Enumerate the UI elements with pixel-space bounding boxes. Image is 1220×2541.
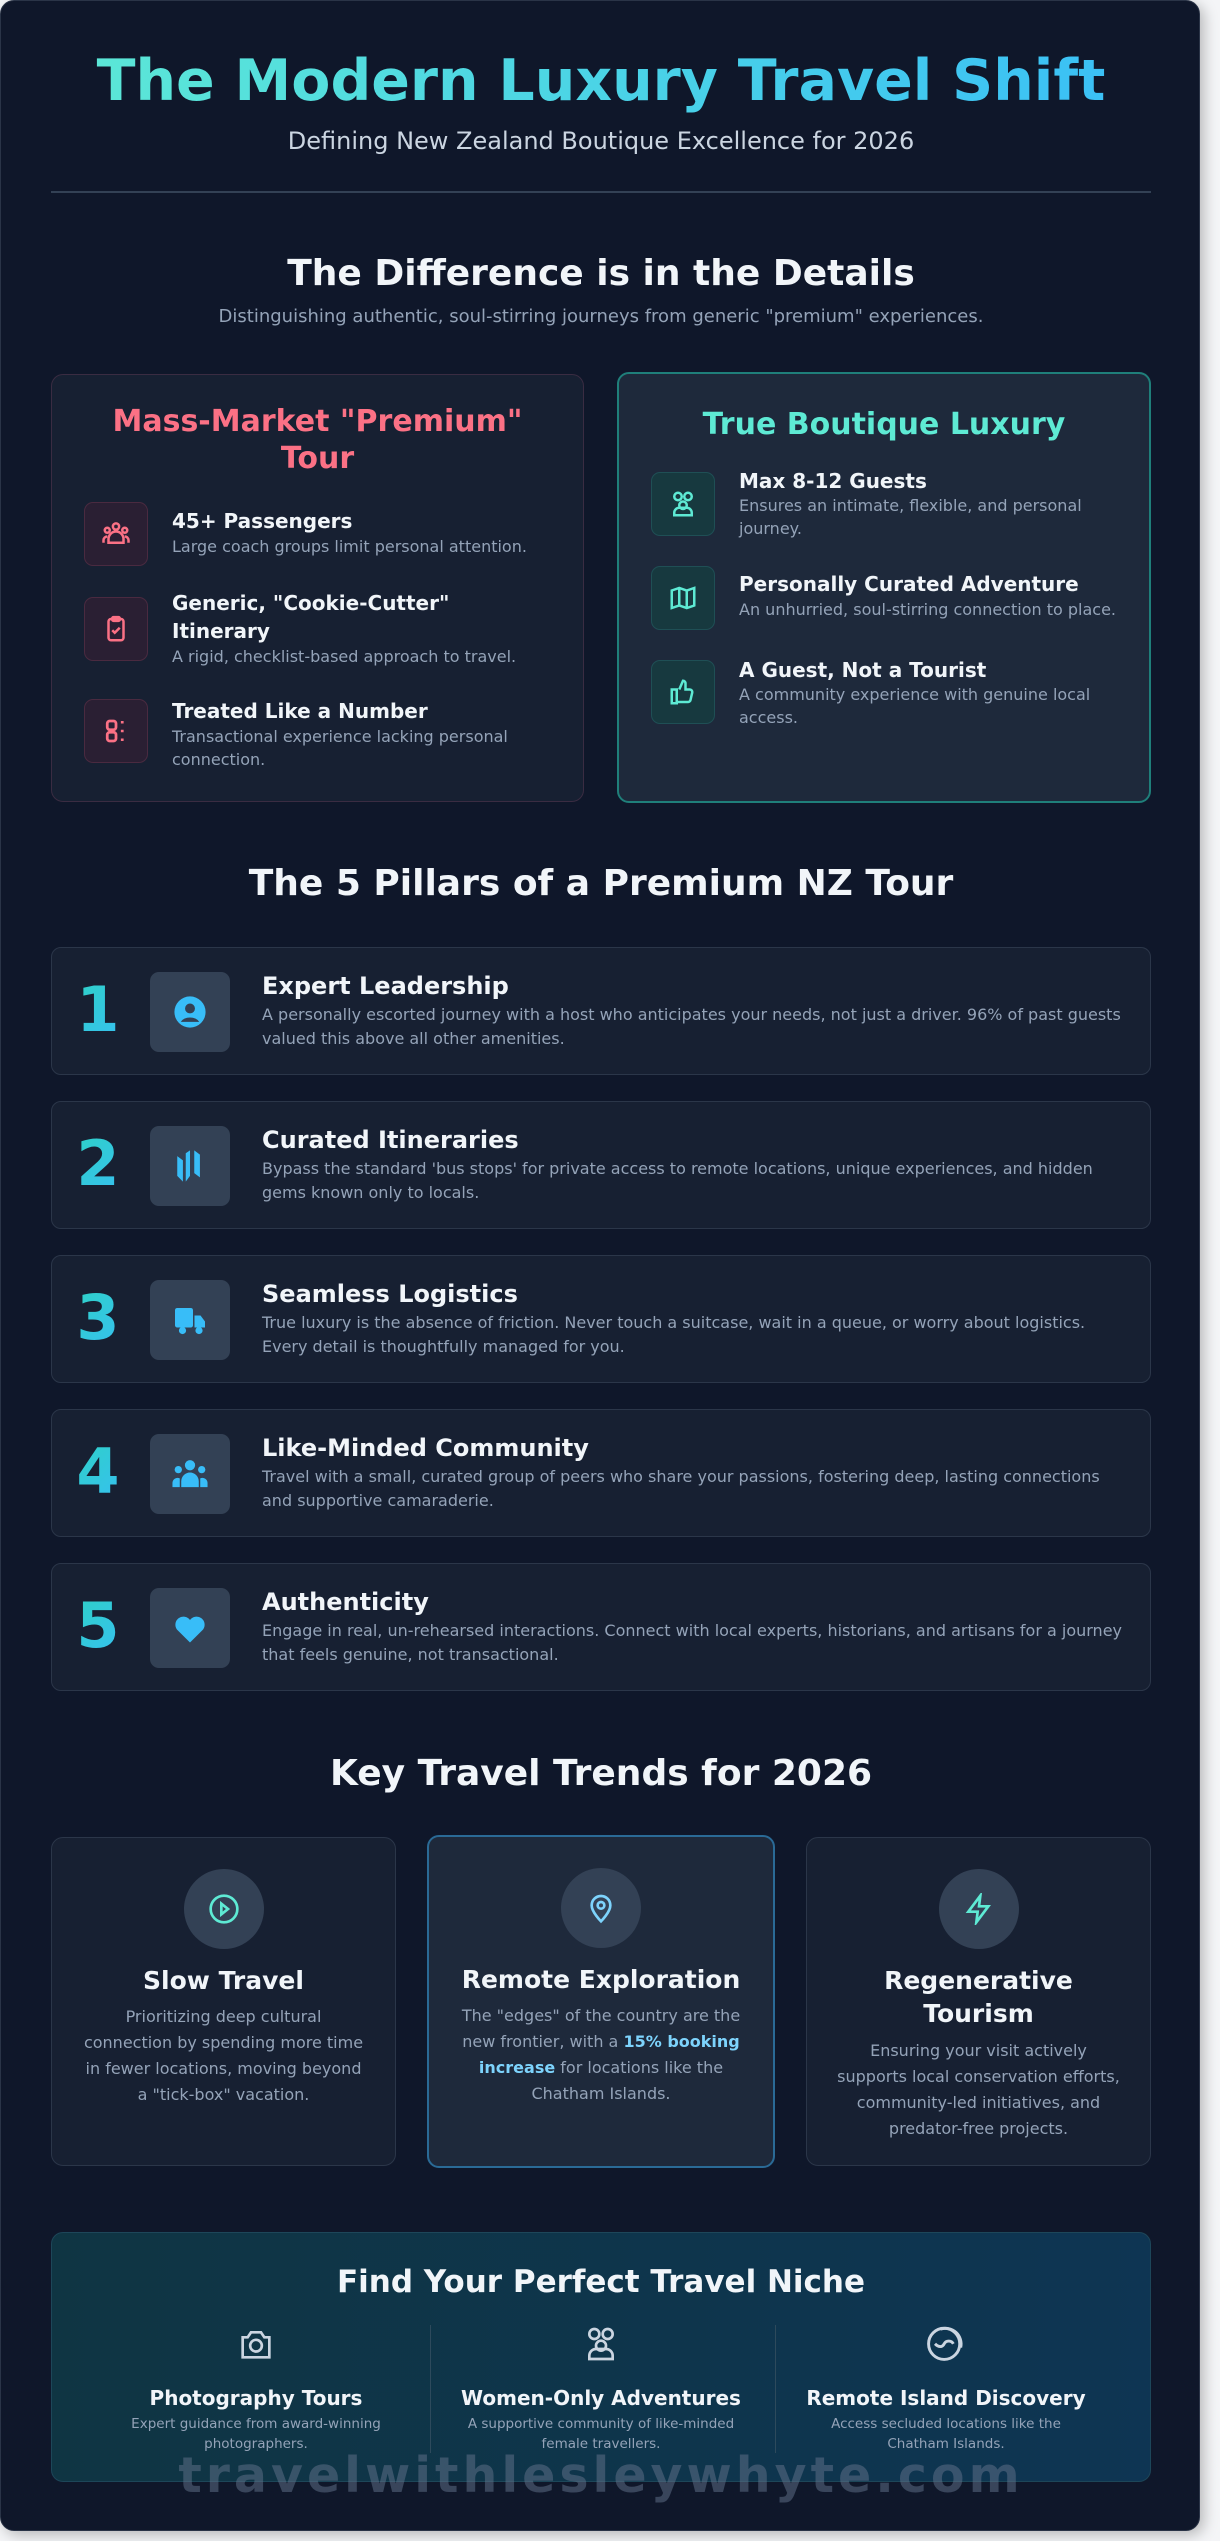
- item: guest not tourist: [651, 658, 1090, 727]
- niche: photography: [131, 2331, 381, 2452]
- icon: heart: [150, 1588, 230, 1668]
- item: max guests: [651, 469, 1082, 538]
- niche: photography: Expert guidance from award-winning: [131, 2416, 381, 2432]
- niche: women-only: Women-Only Adventures: [461, 2386, 741, 2410]
- title: The Modern Luxury Travel Shift: [97, 48, 1105, 114]
- trend card: regenerative: Regenerative: [884, 1966, 1073, 1995]
- pillar 1: [51, 947, 1151, 1075]
- niche heading: Find Your Perfect Travel Niche: [337, 2264, 865, 2300]
- watermark: travelwithlesleywhyte.com: [178, 2447, 1024, 2504]
- icon: pin: [561, 1868, 641, 1948]
- icon: person: [150, 972, 230, 1052]
- niche: photography: photographers.: [204, 2436, 308, 2452]
- heading: difference: The Difference is in the Details: [287, 253, 915, 294]
- panel: mass-market: [51, 374, 584, 802]
- panel heading: mass-market: Mass-Market "Premium": [112, 404, 522, 439]
- trend card: slow travel: Prioritizing deep cultural connection by spending more time in fewer locations, moving beyond a "tick-box" vacation.: [84, 2007, 363, 2104]
- trend card: remote exploration: The "edges" of the country are the new frontier, with a 15% booking increase for locations like the Chatham Islands.: [462, 2006, 740, 2103]
- niche: remote island: Chatham Islands.: [887, 2436, 1005, 2452]
- icon: bolt: [938, 1869, 1018, 1949]
- pillar 3: [51, 1255, 1151, 1383]
- pillar 3: Seamless Logistics: [262, 1280, 518, 1308]
- item: 45+ passengers: 45+ Passengers: [172, 509, 352, 533]
- panel heading: boutique: True Boutique Luxury: [703, 407, 1065, 442]
- icon: group: [150, 1434, 230, 1514]
- item: guest not tourist: A Guest, Not a Tourist: [739, 658, 986, 682]
- pillar 4: 4: [76, 1435, 120, 1508]
- pillar 1: A personally escorted journey with a host who anticipates your needs, not just a driver. 96% of past guests valued this above all other amenities.: [262, 1005, 1121, 1048]
- icon: play circle: [184, 1869, 264, 1949]
- niche: remote island: Access secluded locations like the: [831, 2416, 1061, 2432]
- item: treated like number: Transactional experience lacking personal connection.: [172, 727, 508, 769]
- pillar 2: 2: [76, 1127, 120, 1200]
- trend card: slow travel: [51, 1837, 396, 2166]
- item: max guests: Max 8-12 Guests: [739, 469, 927, 493]
- pillar 2: [51, 1101, 1151, 1229]
- pillar 2: Bypass the standard 'bus stops' for private access to remote locations, unique experiences, and hidden gems known only to locals.: [262, 1159, 1093, 1202]
- item: curated adventure: [651, 566, 1116, 630]
- pillar 2: Curated Itineraries: [262, 1126, 519, 1154]
- title: [1, 41, 1201, 121]
- pillar 5: 5: [76, 1589, 120, 1662]
- pillar 5: Engage in real, un-rehearsed interactions. Connect with local experts, historians, and artisans for a journey that feels genuine, not transactional.: [262, 1621, 1122, 1664]
- item: cookie-cutter: A rigid, checklist-based approach to travel.: [172, 647, 516, 666]
- pillar 1: 1: [76, 973, 120, 1046]
- item: guest not tourist: A community experience with genuine local access.: [739, 685, 1090, 727]
- icon: map: [150, 1126, 230, 1206]
- item: max guests: Ensures an intimate, flexible, and personal journey.: [739, 496, 1082, 538]
- trend card: regenerative: Ensuring your visit actively supports local conservation efforts, community-led initiatives, and predator-free projects.: [837, 2041, 1120, 2138]
- subtitle: Defining New Zealand Boutique Excellence for 2026: [288, 127, 914, 155]
- trend card: regenerative: [806, 1837, 1151, 2166]
- item: treated like number: Treated Like a Number: [172, 699, 428, 723]
- pillar 5: Authenticity: [262, 1588, 429, 1616]
- heading: pillars: The 5 Pillars of a Premium NZ Tour: [249, 863, 953, 904]
- niche: women-only: A supportive community of like-minded: [468, 2416, 734, 2432]
- niche: remote island: [806, 2326, 1086, 2452]
- panel: travel niche: [51, 2232, 1151, 2482]
- item: 45+ passengers: [84, 502, 527, 566]
- panel heading: mass-market: Tour: [281, 441, 354, 476]
- niche: remote island: Remote Island Discovery: [806, 2386, 1086, 2410]
- item: treated like number: [84, 699, 508, 769]
- pillar 5: [51, 1563, 1151, 1691]
- pillar 4: Travel with a small, curated group of peers who share your passions, fostering deep, lasting connections and supportive camaraderie.: [262, 1467, 1100, 1510]
- pillar 4: Like-Minded Community: [262, 1434, 589, 1462]
- pillar 4: [51, 1409, 1151, 1537]
- heading: trends: Key Travel Trends for 2026: [330, 1753, 872, 1794]
- item: cookie-cutter: [84, 591, 516, 666]
- niche: women-only: [461, 2328, 741, 2452]
- niche: photography: Photography Tours: [150, 2386, 362, 2410]
- item: curated adventure: An unhurried, soul-stirring connection to place.: [739, 600, 1116, 619]
- icon: truck: [150, 1280, 230, 1360]
- pillar 3: 3: [76, 1281, 120, 1354]
- panel heading: mass-market: [112, 404, 522, 476]
- subheading: difference: Distinguishing authentic, soul-stirring journeys from generic "premium" experiences.: [219, 306, 983, 327]
- item: curated adventure: Personally Curated Adventure: [739, 572, 1079, 596]
- trend card: slow travel: Slow Travel: [143, 1966, 304, 1995]
- item: cookie-cutter: Generic, "Cookie-Cutter" Itinerary: [172, 591, 449, 643]
- niche: women-only: female travellers.: [542, 2436, 660, 2452]
- panel: boutique: [617, 372, 1151, 803]
- trend card: remote exploration: [427, 1835, 775, 2168]
- item: 45+ passengers: Large coach groups limit personal attention.: [172, 537, 527, 556]
- pillar 1: Expert Leadership: [262, 972, 509, 1000]
- trend card: regenerative: Tourism: [923, 1999, 1034, 2028]
- pillar 3: True luxury is the absence of friction. Never touch a suitcase, wait in a queue, or worry about logistics. Every detail is thoughtfully managed for you.: [262, 1313, 1085, 1356]
- trend card: remote exploration: Remote Exploration: [462, 1965, 740, 1994]
